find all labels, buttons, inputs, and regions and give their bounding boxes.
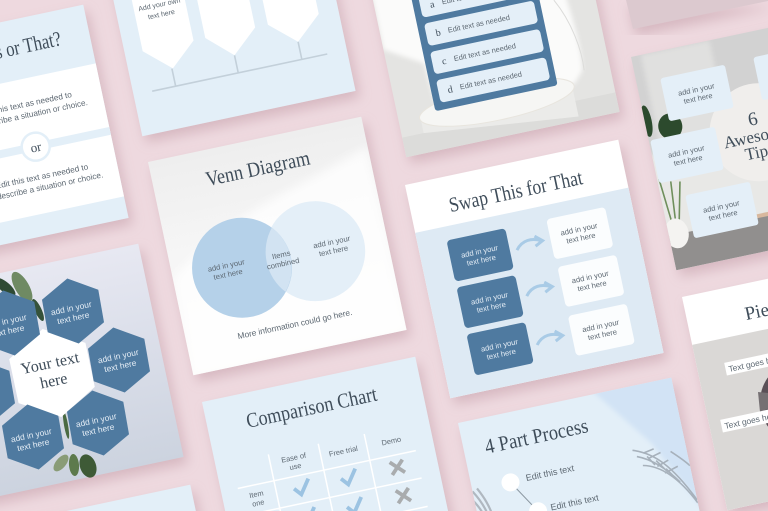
hexagon label upper left xyxy=(0,312,30,340)
white box text: text here xyxy=(577,278,607,293)
blue body xyxy=(415,188,664,398)
white box text: add in your xyxy=(560,221,599,238)
row label xyxy=(248,488,266,509)
caption: More information could go here. xyxy=(237,307,353,341)
label overlap: combined xyxy=(266,256,300,271)
column headers: Free trial xyxy=(328,444,359,459)
label overlap xyxy=(264,247,300,271)
row label: one xyxy=(251,497,265,509)
hexagon label lower left: text here xyxy=(16,437,51,453)
or badge xyxy=(19,130,52,163)
wall light area xyxy=(642,42,714,138)
panel: bottom card xyxy=(0,485,236,511)
center hexagon text: Your text xyxy=(19,349,81,378)
panel: pink card top right xyxy=(626,0,768,29)
node two xyxy=(527,501,549,511)
dark box text: add in your xyxy=(460,243,499,260)
dark box text: text here xyxy=(486,347,517,362)
panel: four part process xyxy=(458,378,706,511)
tag text xyxy=(138,0,246,23)
podium base xyxy=(424,101,578,133)
hexagon label lower left: add in your xyxy=(10,426,53,444)
tip tag one xyxy=(660,65,734,121)
tip tag one: text here xyxy=(683,91,713,106)
row labels: c xyxy=(441,56,448,68)
white tags xyxy=(125,0,324,74)
hexagon label lower left xyxy=(10,426,55,454)
label overlap: Items xyxy=(271,248,291,261)
heading: 4 Part Process xyxy=(483,413,590,459)
white box text: add in your xyxy=(571,269,610,285)
plant leaves lower xyxy=(51,411,100,480)
plant leaves xyxy=(642,106,682,138)
label right: text here xyxy=(318,243,349,258)
overlap xyxy=(260,225,297,294)
label right: add in your xyxy=(312,234,351,250)
center hexagon text xyxy=(19,349,85,396)
blue list panel xyxy=(404,0,558,111)
photo backdrop xyxy=(692,300,768,510)
grass left xyxy=(472,488,492,511)
panel: hexagon cluster xyxy=(0,244,184,502)
center hexagon xyxy=(0,322,107,424)
center hexagon text: here xyxy=(39,370,69,392)
pie xyxy=(758,360,768,444)
tip tag one: add in your xyxy=(677,81,716,98)
label right xyxy=(312,234,353,259)
baseline xyxy=(148,36,327,91)
panel: six tips xyxy=(625,12,768,271)
grid xyxy=(232,424,442,511)
grass right xyxy=(632,448,698,504)
white box text: text here xyxy=(565,231,596,246)
row text xyxy=(441,0,523,91)
dark box text: text here xyxy=(466,253,497,268)
dark box text: add in your xyxy=(470,290,509,307)
hexagon label lower right xyxy=(75,411,120,439)
step text one: Edit this text xyxy=(525,463,575,483)
panel: podium list xyxy=(361,0,620,157)
hexagon label lower right: add in your xyxy=(75,411,118,429)
arrows xyxy=(515,235,564,345)
hexagon label top: text here xyxy=(56,310,91,326)
tip tag three xyxy=(685,182,759,238)
hexagon label lower right: text here xyxy=(81,422,116,438)
panel: venn diagram xyxy=(148,117,407,375)
or badge: or xyxy=(29,139,43,156)
tip tag two: add in your xyxy=(667,143,706,160)
tip tag two xyxy=(650,127,724,183)
heading: Comparison Chart xyxy=(244,382,379,433)
plant stems xyxy=(658,179,681,220)
panel: timeline xyxy=(97,0,356,136)
table edge xyxy=(756,212,768,218)
node one xyxy=(500,472,521,493)
panel: pie chart xyxy=(682,252,768,510)
tag text: text here xyxy=(148,9,176,21)
row text: Edit text as needed xyxy=(447,13,511,35)
divider band xyxy=(0,127,111,180)
list rows xyxy=(418,0,550,103)
panel: comparison chart xyxy=(202,357,461,511)
panel: swap this for that xyxy=(405,140,664,398)
white boxes xyxy=(546,207,635,356)
dark box text xyxy=(460,243,521,362)
white box text xyxy=(560,221,622,343)
hexagon label top: add in your xyxy=(50,299,93,317)
tip tag four xyxy=(753,44,768,100)
circle left xyxy=(183,208,301,327)
hexagon label right: text here xyxy=(103,358,138,374)
row label: Item xyxy=(248,488,264,500)
row labels xyxy=(430,2,454,93)
round title badge: 6 xyxy=(746,108,760,131)
hexagons blue xyxy=(0,273,160,475)
dark box text: text here xyxy=(476,300,507,315)
row text: Edit text as needed xyxy=(459,70,523,91)
tip tag three: add in your xyxy=(702,198,741,215)
tip tag three: text here xyxy=(708,208,738,223)
hexagon label top xyxy=(50,299,95,327)
label left xyxy=(207,257,248,283)
column headers xyxy=(280,431,403,473)
white box text: add in your xyxy=(581,318,620,334)
photo backdrop xyxy=(373,0,583,91)
panel: this or that xyxy=(0,5,129,263)
hexagon label right: add in your xyxy=(97,347,140,365)
circle right xyxy=(256,192,374,310)
cross marks xyxy=(390,460,411,503)
round title badge xyxy=(700,74,768,190)
tip tag two: text here xyxy=(673,153,703,168)
column headers: Demo xyxy=(381,435,402,447)
white box text: text here xyxy=(587,327,618,342)
row labels: b xyxy=(435,27,442,39)
heading: Swap This for That xyxy=(447,165,585,217)
silk highlight xyxy=(268,156,369,210)
column headers: use xyxy=(289,461,302,472)
connector xyxy=(510,478,538,511)
hexagon label right xyxy=(97,347,142,375)
column headers: Ease of xyxy=(280,450,308,465)
podium xyxy=(420,78,574,126)
label left: text here xyxy=(213,267,243,282)
dark boxes xyxy=(446,228,534,376)
row labels: d xyxy=(447,84,454,96)
dark box text: add in your xyxy=(480,337,519,354)
plant leaves upper xyxy=(0,269,46,322)
label left: add in your xyxy=(207,257,246,274)
sky shape xyxy=(596,378,696,498)
pot xyxy=(666,218,689,248)
white answer area xyxy=(0,63,124,242)
counter xyxy=(669,216,768,270)
check marks xyxy=(293,469,364,511)
heading: Venn Diagram xyxy=(203,146,312,191)
row text: Edit text as needed xyxy=(453,41,517,63)
